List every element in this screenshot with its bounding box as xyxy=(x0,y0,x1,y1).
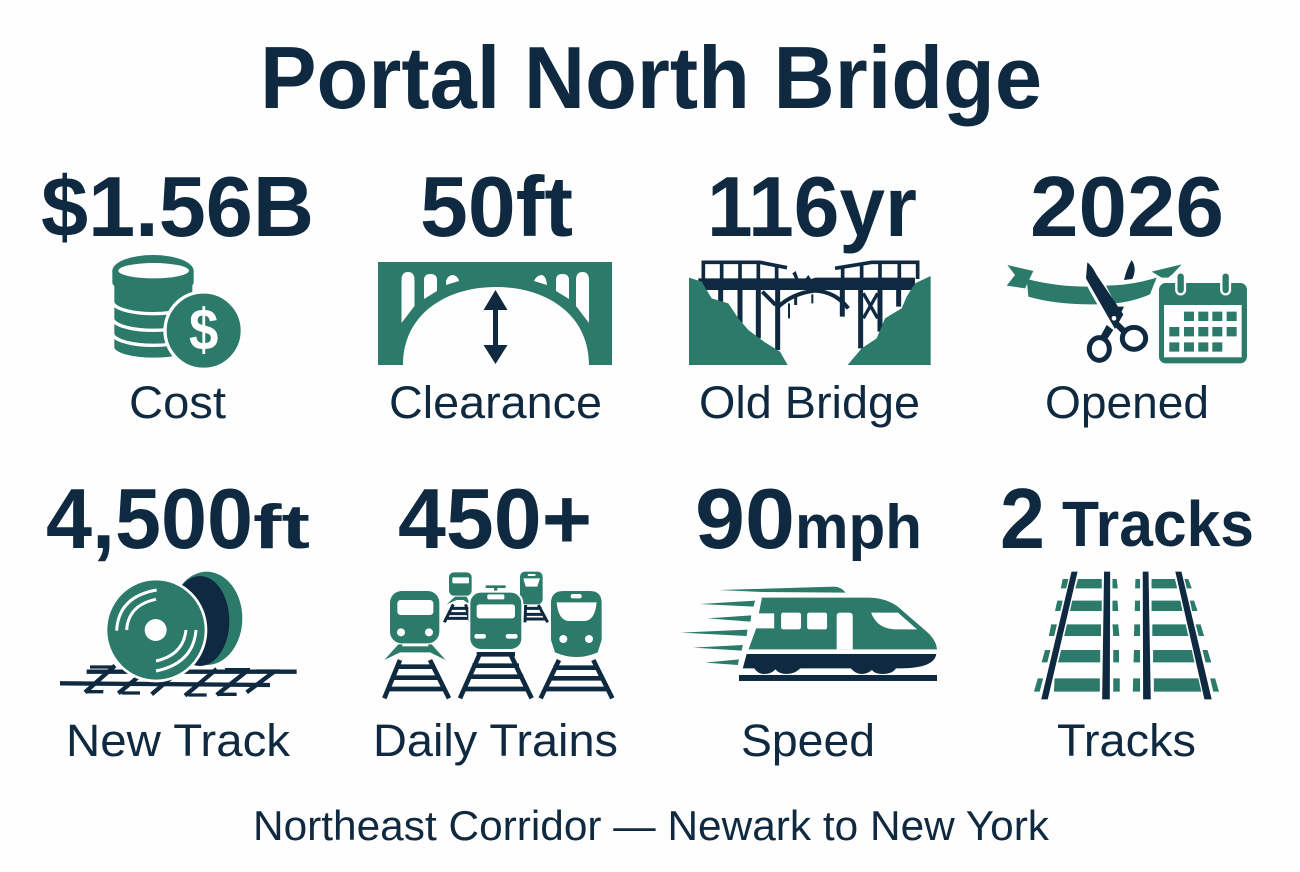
panel: speed xyxy=(681,472,937,766)
label: old bridge: Old Bridge xyxy=(699,377,920,428)
icon: broken old bridge between cliffs xyxy=(689,262,931,365)
stat value: opened: 2026 xyxy=(1030,160,1224,255)
icon: high-speed train with speed lines xyxy=(681,587,937,681)
icon: two parallel railway tracks xyxy=(1034,572,1219,699)
label: new track: New Track xyxy=(66,715,291,766)
stat value: speed: 90 xyxy=(695,472,795,567)
icon: coin stack with dollar coin: $ xyxy=(189,297,218,362)
stat unit: miles per hour: mph xyxy=(795,493,922,562)
label: clearance: Clearance xyxy=(389,377,602,428)
title: Portal North Bridge xyxy=(260,28,1042,127)
panel: opened xyxy=(1007,160,1248,428)
stat value: new track: 4,500 xyxy=(46,472,253,567)
panel: old bridge xyxy=(689,160,931,428)
stat value: clearance: 50ft xyxy=(420,160,573,255)
icon: five trains on tracks xyxy=(384,572,612,698)
icon: coin stack with dollar coin xyxy=(112,255,242,369)
label: speed: Speed xyxy=(741,715,875,766)
label: daily trains: Daily Trains xyxy=(373,715,618,766)
stat value: daily trains: 450+ xyxy=(398,472,592,567)
stat value: old bridge: 116yr xyxy=(707,160,917,255)
footer caption: Northeast Corridor — Newark to New York xyxy=(253,802,1050,849)
panel: new track xyxy=(46,472,310,766)
icon: rail spool on track xyxy=(60,572,297,696)
icon: ribbon, scissors and calendar xyxy=(1007,260,1248,364)
stat unit: tracks: Tracks xyxy=(1062,488,1254,560)
label: opened: Opened xyxy=(1045,377,1209,428)
stat value: cost: $1.56B xyxy=(41,160,314,255)
panel: daily trains xyxy=(373,472,618,766)
panel: cost xyxy=(41,160,314,428)
panel: tracks xyxy=(1000,472,1254,766)
label: cost: Cost xyxy=(129,377,227,428)
stat unit: feet: ft xyxy=(253,493,310,562)
panel: clearance xyxy=(378,160,612,428)
icon: arch bridge with clearance arrow xyxy=(378,262,612,365)
label: tracks: Tracks xyxy=(1057,715,1196,766)
stat value: tracks count: 2 xyxy=(1000,472,1045,567)
